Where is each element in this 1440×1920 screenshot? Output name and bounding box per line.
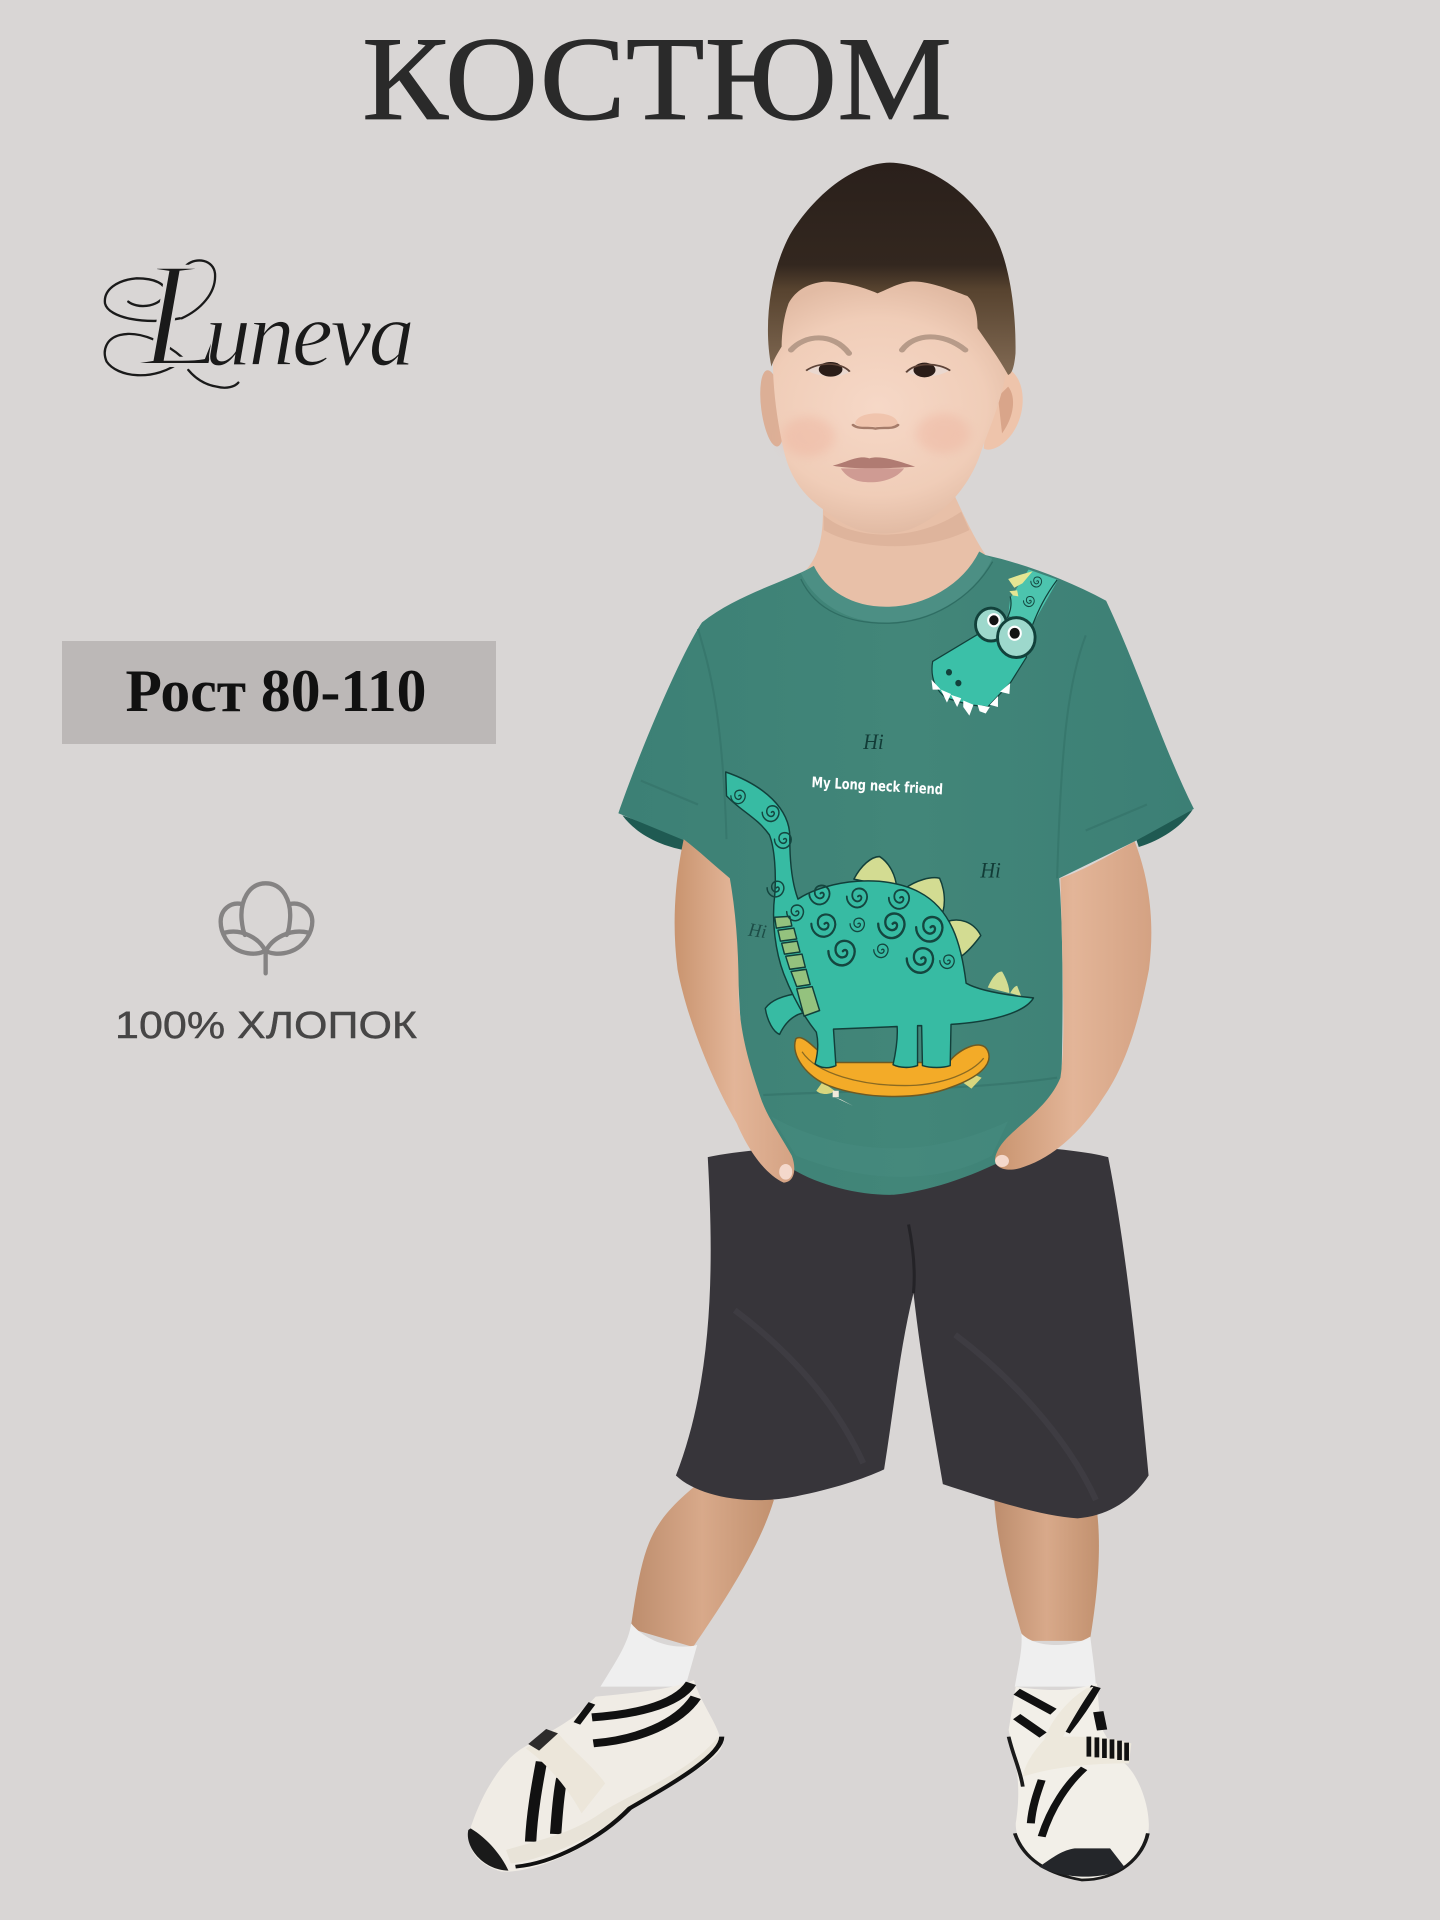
hair xyxy=(768,163,1016,375)
skateboard xyxy=(816,1073,982,1094)
cheeks xyxy=(782,417,835,457)
top dino print xyxy=(931,569,1058,716)
size badge: Рост 80-110 xyxy=(126,658,426,724)
shirt folds and seams xyxy=(641,629,1147,1095)
socks xyxy=(600,1623,1096,1687)
Hi captions: Hi xyxy=(746,919,768,943)
right arm xyxy=(995,841,1151,1170)
collar xyxy=(807,555,986,615)
dinosaur print xyxy=(726,772,1033,1106)
t-shirt xyxy=(618,555,1194,1195)
material label: 100% ХЛОПОК xyxy=(115,1005,417,1047)
brand logo: Luneva: uneva xyxy=(205,283,412,385)
shirt body xyxy=(618,555,1194,1195)
neck xyxy=(806,493,986,608)
legs xyxy=(631,1476,1099,1647)
sleeve lining xyxy=(622,810,1193,850)
ears xyxy=(756,369,788,447)
right shoe xyxy=(1009,1683,1149,1881)
spirals xyxy=(809,885,830,904)
neck and head xyxy=(756,163,1023,608)
brand logo: Luneva xyxy=(105,232,412,398)
shorts xyxy=(676,1143,1149,1518)
arms and hands xyxy=(675,839,1151,1183)
face xyxy=(773,267,1008,534)
size badge xyxy=(62,641,496,744)
title: КОСТЮМ xyxy=(362,12,952,145)
Hi captions: Hi xyxy=(979,858,1001,883)
Hi captions xyxy=(746,729,1001,943)
brand logo: Luneva: L xyxy=(138,232,223,398)
print slogan: My Long neck friend xyxy=(811,775,943,799)
neck stripes xyxy=(775,916,820,1016)
icon: cotton boll xyxy=(221,883,312,973)
nose xyxy=(855,413,898,427)
eyes xyxy=(806,363,850,376)
left arm xyxy=(675,839,794,1183)
plates xyxy=(854,857,897,888)
Hi captions: Hi xyxy=(862,729,884,754)
tail xyxy=(765,993,804,1034)
mouth xyxy=(833,457,915,468)
left shoe xyxy=(468,1680,722,1872)
body, neck and legs xyxy=(726,772,1033,1068)
boy wearing the outfit xyxy=(468,163,1194,1881)
eyebrows xyxy=(791,337,965,353)
